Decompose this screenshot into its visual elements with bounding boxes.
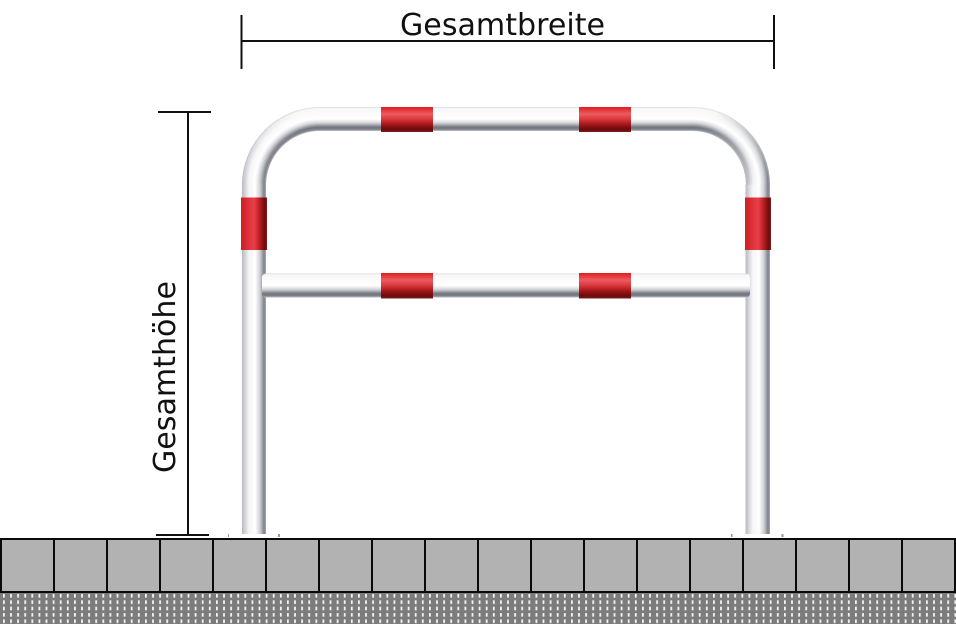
red bands on posts [241,198,771,250]
ground [0,539,956,624]
left post [242,185,266,534]
top rail [320,107,692,131]
middle rail [262,274,750,298]
left corner bend [242,107,320,185]
label: Gesamtbreite: Gesamtbreite [400,8,605,43]
red bands on top rail [381,107,631,132]
base plate specks [228,534,784,537]
dimension: Gesamtbreite [242,8,774,69]
gravel layer [0,593,956,624]
paving stones [1,539,956,592]
label: Gesamthöhe: Gesamthöhe [148,281,183,473]
red bands on middle rail [381,273,631,298]
right post [746,185,770,534]
barrier [228,107,784,537]
right corner bend [692,107,770,185]
dimension: Gesamthöhe [148,112,211,535]
